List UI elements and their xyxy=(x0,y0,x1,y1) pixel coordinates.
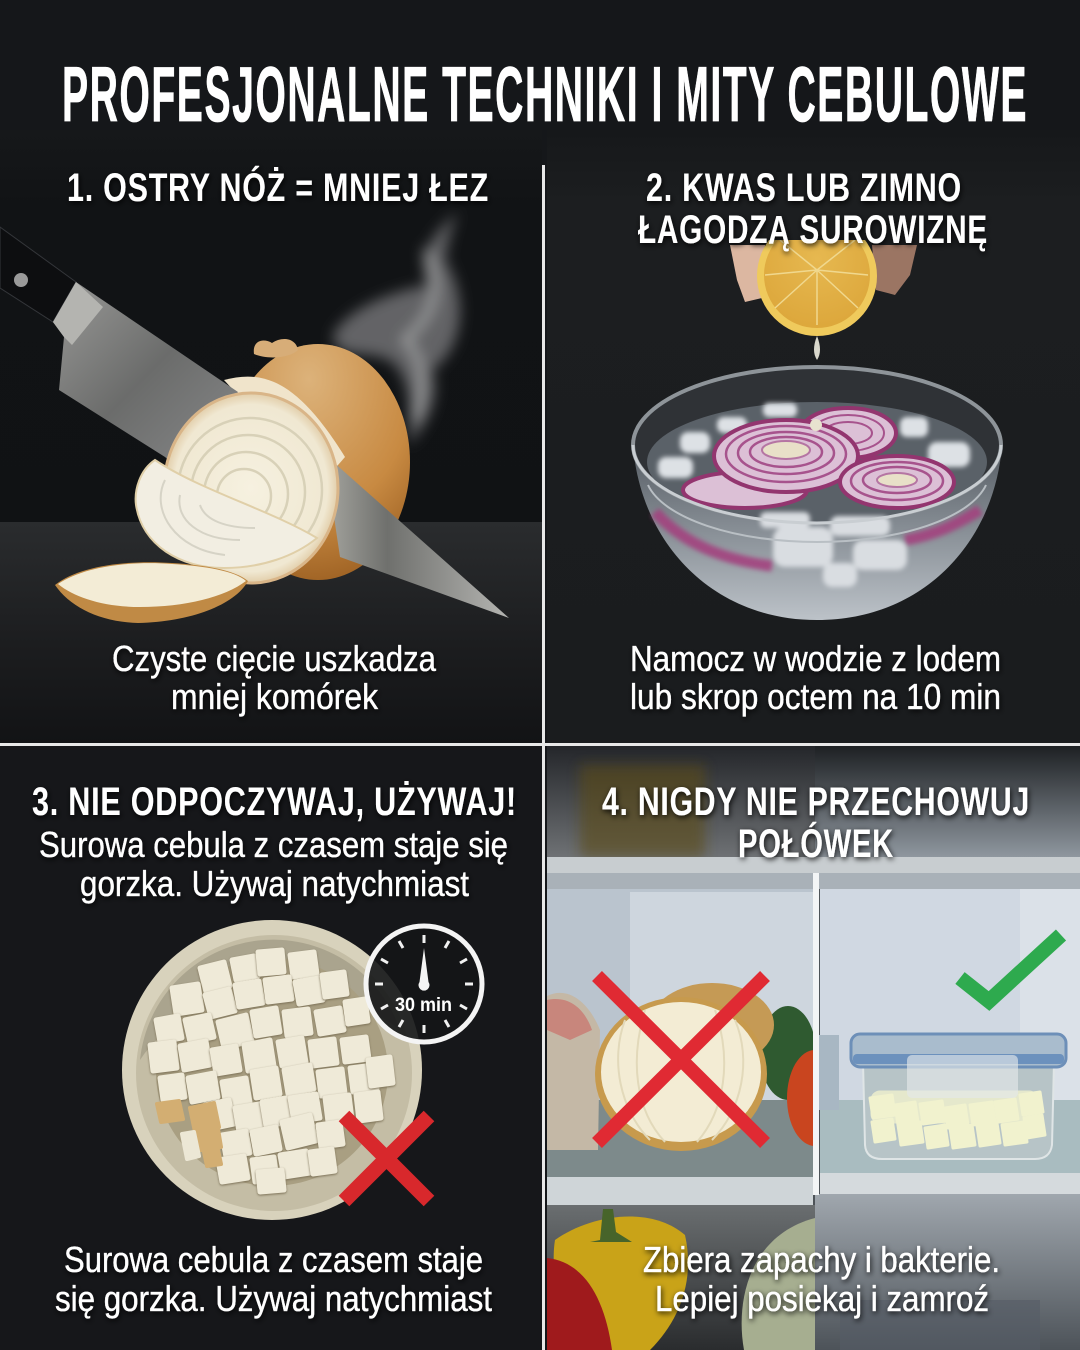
juice drop xyxy=(812,375,824,387)
heading 3 with intro: Surowa cebula z czasem staje się xyxy=(39,824,508,865)
panel 4: never store halves xyxy=(547,746,1080,1350)
heading 3 with intro: 3. NIE ODPOCZYWAJ, UŻYWAJ! xyxy=(32,780,517,824)
panel 2: lemon and ice water xyxy=(631,240,1003,620)
body text 2: lub skrop octem na 10 min xyxy=(630,676,1001,717)
browned onion dice xyxy=(157,1101,221,1166)
fruit and vegetables on lower shelf xyxy=(547,1209,1040,1350)
panel 1: sharp knife xyxy=(0,130,542,743)
icon: timer 30 min xyxy=(366,926,482,1042)
icon: steam xyxy=(333,212,460,445)
icon: timer 30 min: 30 min xyxy=(395,995,452,1016)
submerged ice xyxy=(760,512,907,587)
body text 2 xyxy=(630,638,1001,717)
ice cubes floating xyxy=(658,403,970,478)
container behind divider xyxy=(819,1035,839,1110)
body text 1 xyxy=(112,638,437,717)
hand and lemon xyxy=(730,240,917,360)
body text 3: się gorzka. Używaj natychmiast xyxy=(55,1278,492,1319)
glass container xyxy=(851,1034,1066,1159)
bowl of diced onion xyxy=(122,920,422,1220)
body text 4: Zbiera zapachy i bakterie. xyxy=(643,1239,1000,1280)
body text 4: Lepiej posiekaj i zamroź xyxy=(655,1278,989,1319)
heading 2 xyxy=(638,166,988,252)
icon: red cross xyxy=(597,976,765,1143)
onion whole xyxy=(224,339,410,580)
fridge divider xyxy=(813,873,819,1195)
submerged onion band xyxy=(655,510,980,566)
onion dice xyxy=(150,950,393,1192)
panel 3: use immediately xyxy=(0,746,542,1350)
knife xyxy=(0,227,509,618)
heading 4 xyxy=(602,780,1030,866)
heading 2: 2. KWAS LUB ZIMNO xyxy=(646,166,962,210)
red onion rings xyxy=(683,408,954,508)
body text 4 xyxy=(643,1239,1000,1319)
glass bowl xyxy=(633,367,1002,620)
heading 3 with intro xyxy=(32,780,517,904)
onion back slice xyxy=(136,460,317,568)
heading 1: 1. OSTRY NÓŻ = MNIEJ ŁEZ xyxy=(67,164,489,210)
body text 3 xyxy=(55,1239,492,1319)
body text 1: Czyste cięcie uszkadza xyxy=(112,638,437,679)
pale onion dice xyxy=(182,1132,199,1159)
fridge interior xyxy=(547,746,1080,1350)
body text 1: mniej komórek xyxy=(171,676,379,717)
onion dice xyxy=(870,1092,1045,1148)
body text 3: Surowa cebula z czasem staje xyxy=(64,1239,483,1280)
icon: red cross xyxy=(344,1116,429,1201)
onion flat slice xyxy=(55,562,248,623)
heading 3 with intro: gorzka. Używaj natychmiast xyxy=(80,863,469,904)
food on left shelf xyxy=(547,983,813,1150)
body text 2: Namocz w wodzie z lodem xyxy=(630,638,1001,679)
onion front slice xyxy=(164,393,338,583)
halved onion xyxy=(595,997,767,1151)
icon: green check xyxy=(960,935,1061,1001)
heading 4: POŁÓWEK xyxy=(738,820,894,866)
